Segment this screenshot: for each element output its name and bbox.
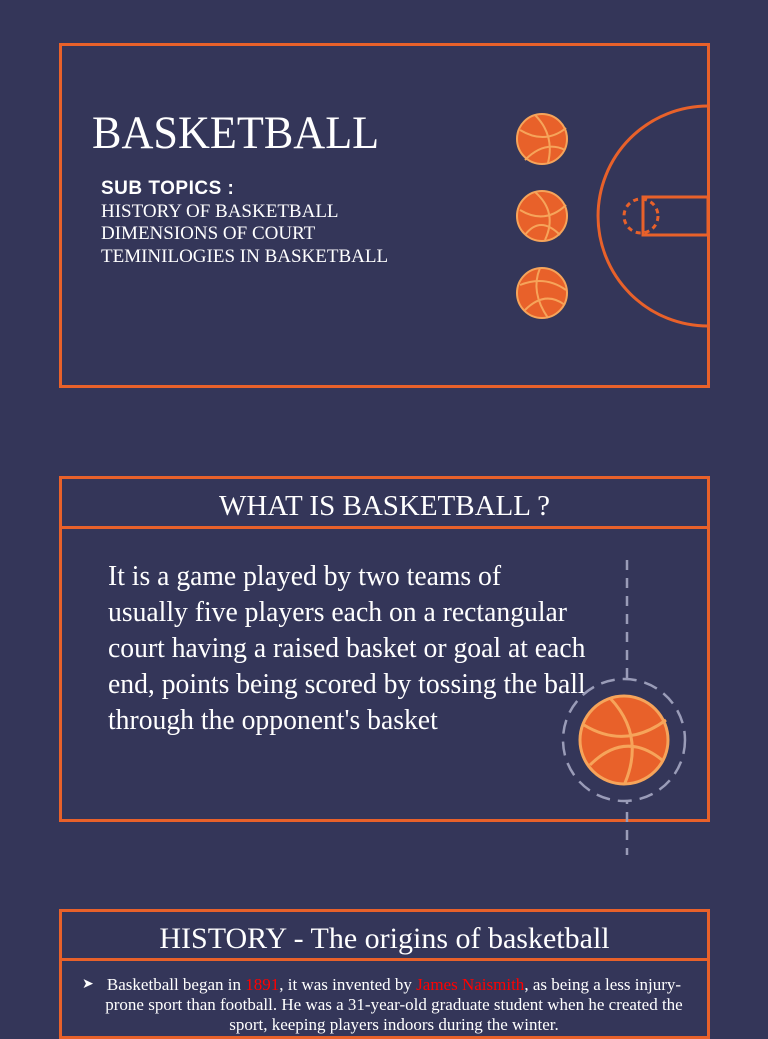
court illustration (516, 104, 707, 328)
panel: history (59, 909, 710, 1039)
subtopics: TEMINILOGIES IN BASKETBALL (101, 246, 388, 266)
text block (105, 975, 683, 1034)
subtopics: DIMENSIONS OF COURT (101, 223, 315, 244)
text block: court having a raised basket or goal at each (108, 633, 585, 664)
text block: sport, keeping players indoors during the winter. (229, 1015, 559, 1034)
title: BASKETBALL (92, 107, 379, 159)
subtopics: HISTORY OF BASKETBALL (101, 200, 339, 222)
icon: ball with dashed ring (562, 560, 686, 855)
panel: what is basketball (59, 476, 710, 822)
heading: HISTORY - The origins of basketball (159, 922, 610, 955)
heading (62, 912, 707, 961)
text block: end, points being scored by tossing the ball (108, 669, 586, 700)
heading: WHAT IS BASKETBALL ? (219, 490, 550, 522)
heading (62, 479, 707, 529)
text block: It is a game played by two teams of (108, 561, 501, 592)
text block: through the opponent's basket (108, 705, 438, 736)
text block: prone sport than football. He was a 31-year-old graduate student when he created the (105, 995, 683, 1014)
text block: Basketball began in 1891, it was invented by James Naismith, as being a less injury- (107, 975, 681, 994)
subtopics (101, 178, 388, 266)
text block (108, 561, 586, 736)
text block: usually five players each on a rectangular (108, 597, 567, 628)
icon: basketballs (517, 114, 567, 318)
subtopics: SUB TOPICS : (101, 178, 234, 199)
bullet: ➤ (82, 977, 94, 992)
panel: title (59, 43, 710, 388)
